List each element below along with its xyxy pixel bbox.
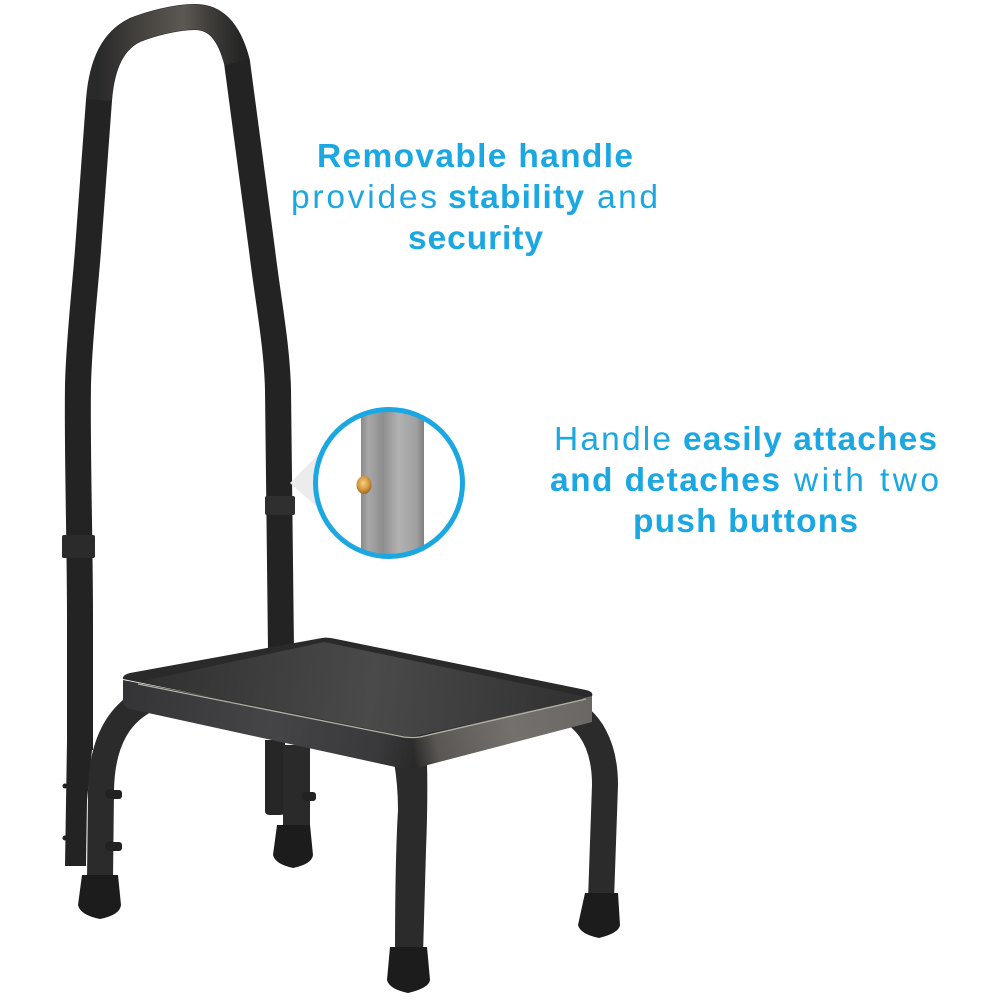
platform left apron (123, 680, 415, 768)
front leg and foot (387, 762, 430, 993)
zoom callout pointer (290, 455, 326, 515)
zoom callout: push button (316, 405, 462, 561)
text block: removable handle (291, 138, 658, 257)
left leg fasteners (62, 784, 122, 851)
arch highlight (99, 17, 237, 100)
platform right apron (412, 694, 592, 768)
text block: easily attaches: and detaches (550, 462, 780, 499)
text block: removable handle: stability (448, 179, 584, 216)
text block: easily attaches: push buttons (633, 503, 858, 540)
right handle collar (265, 496, 295, 515)
step platform (123, 638, 592, 768)
left handle collar (62, 535, 95, 558)
rim highlights (138, 684, 586, 738)
callout ring (316, 410, 462, 556)
text block: removable handle: and (597, 179, 658, 216)
text block: removable handle: Removable handle (317, 138, 633, 175)
platform tread (139, 642, 584, 736)
text block: removable handle: provides (291, 179, 437, 216)
rear fastener (302, 792, 316, 801)
steel tube (361, 405, 424, 561)
text block: easily attaches (550, 421, 939, 540)
text block: removable handle: security (408, 220, 543, 257)
lower left tube taper (65, 740, 93, 866)
rear leg and foot (273, 745, 313, 868)
platform rim (123, 638, 592, 738)
handle bar (62, 17, 295, 866)
front left leg and foot (78, 698, 150, 919)
text block: easily attaches: easily attaches (683, 421, 937, 458)
push button (356, 476, 372, 494)
text block: easily attaches: Handle (554, 421, 671, 458)
rear handle post below the platform (265, 740, 285, 815)
right leg and foot (565, 708, 620, 938)
text block: easily attaches: with two (793, 462, 939, 499)
